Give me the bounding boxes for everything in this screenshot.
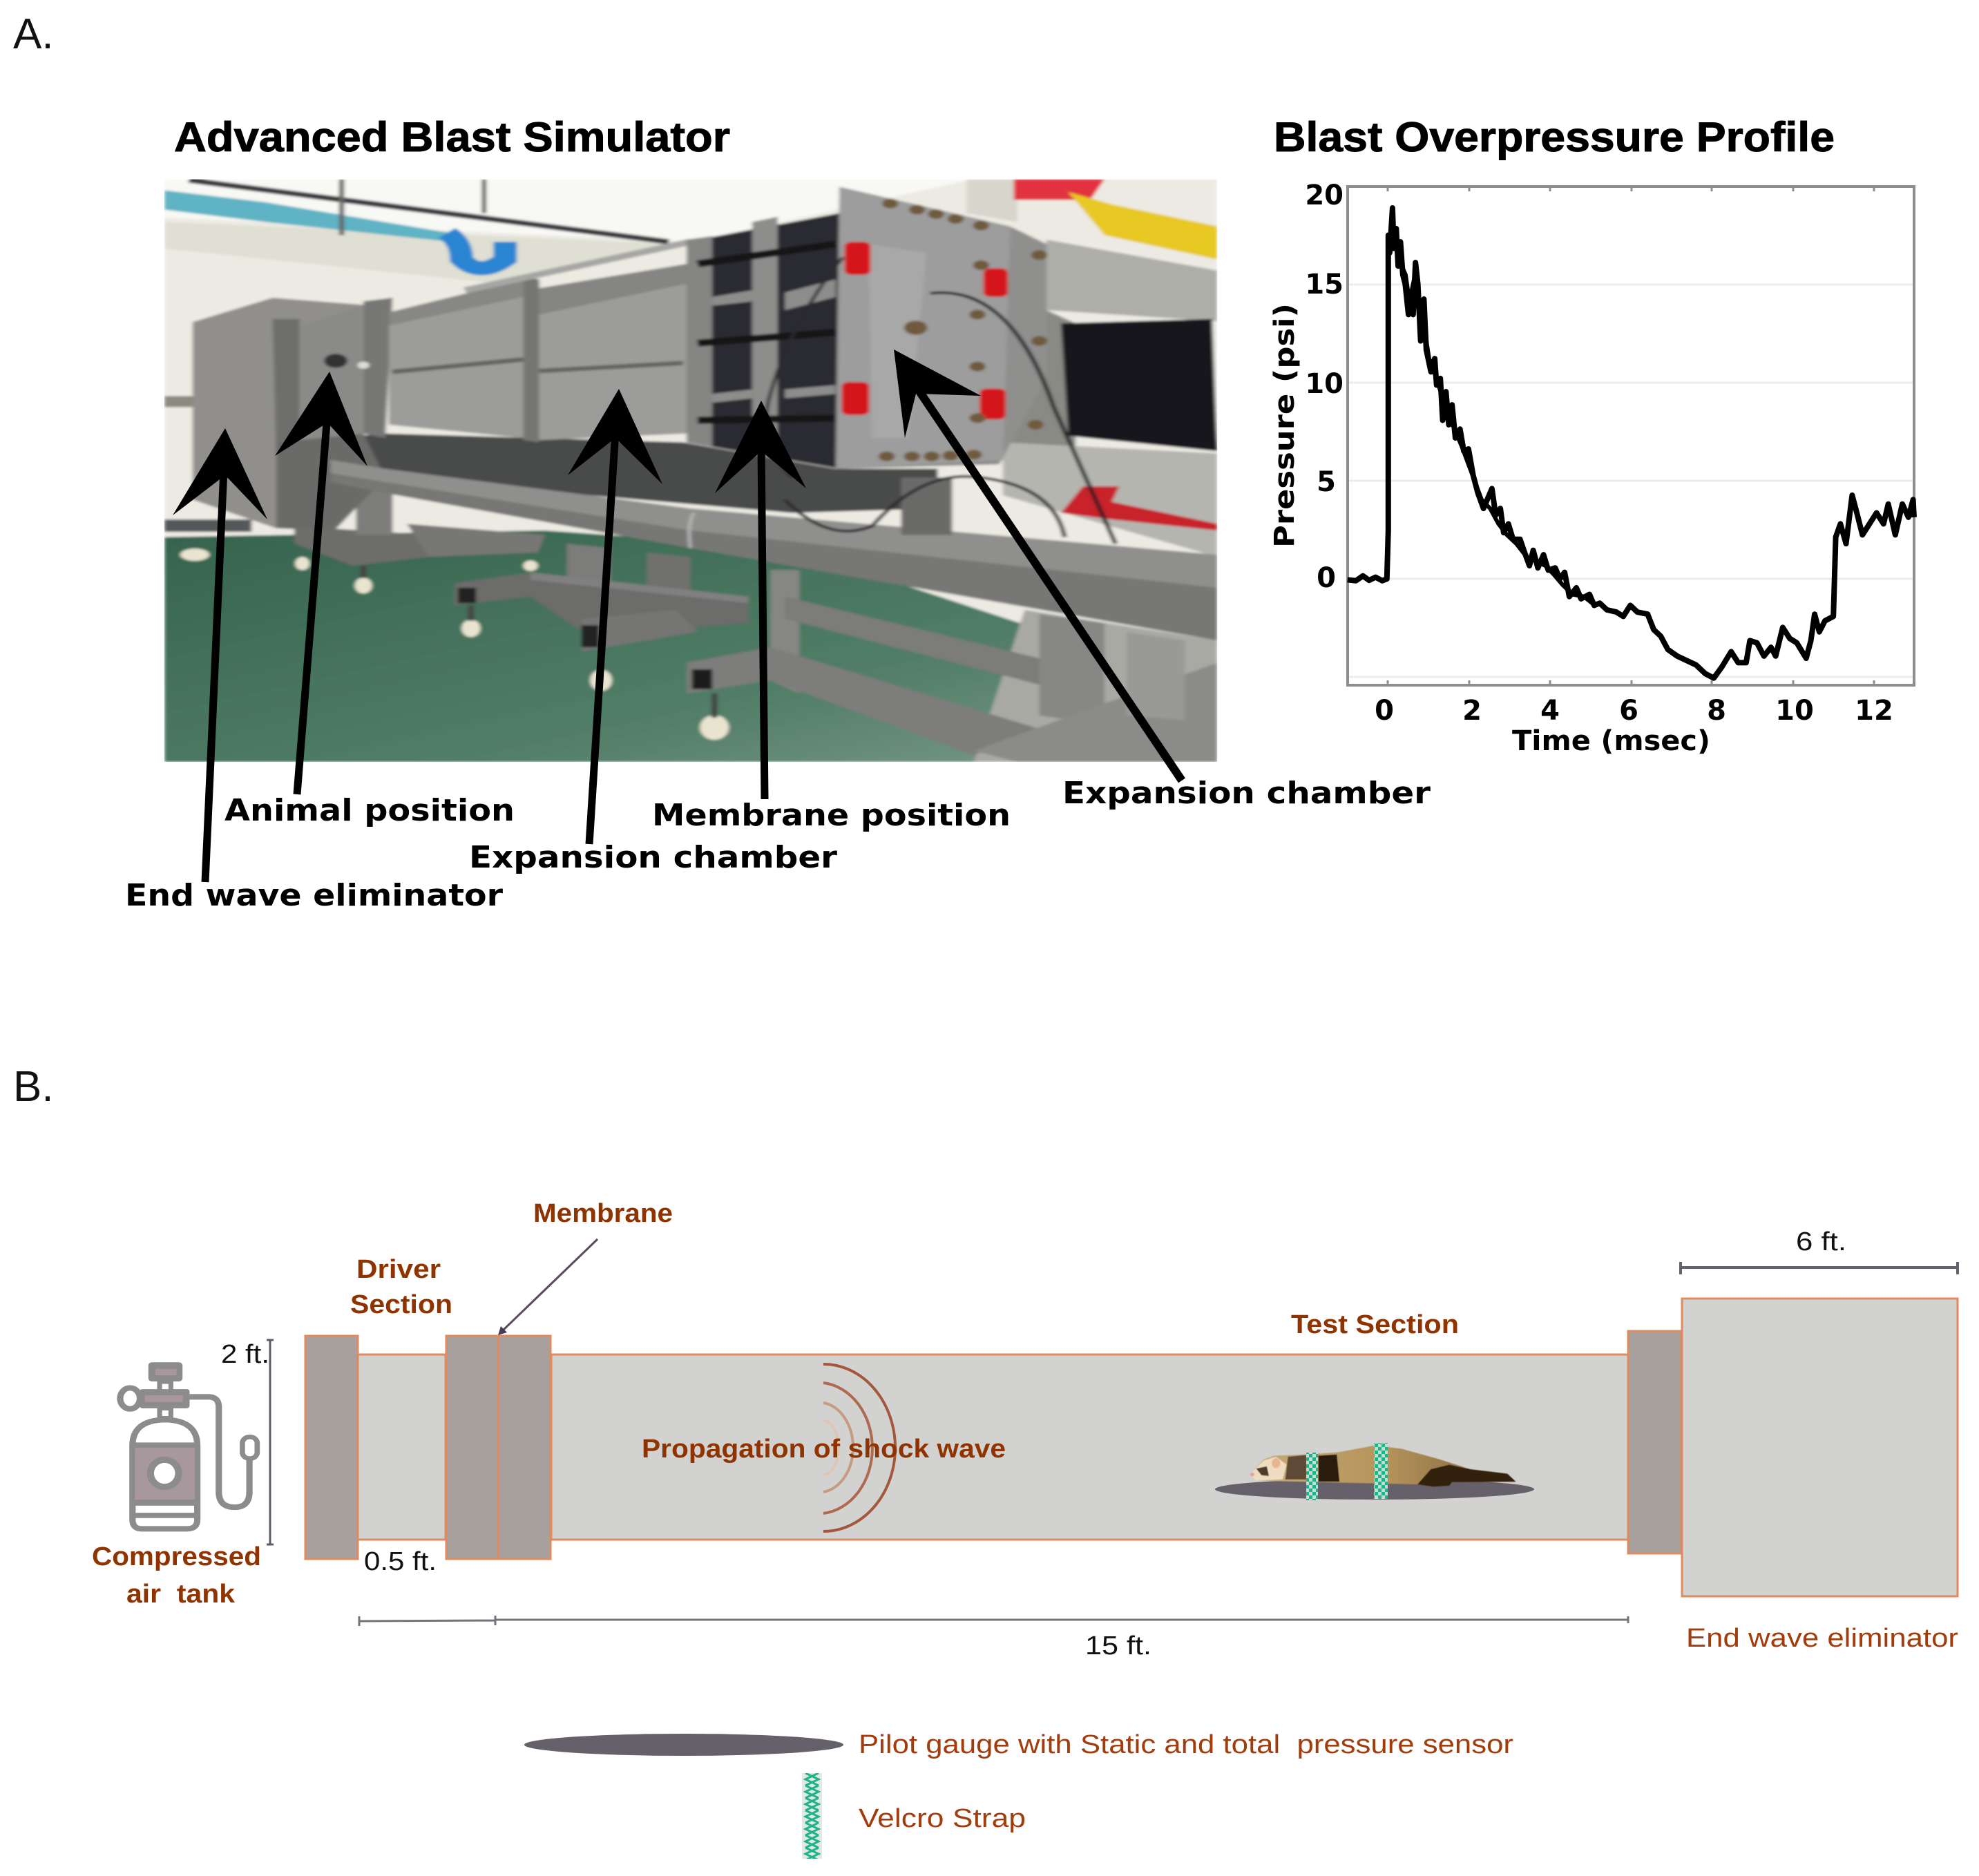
arrow: expansion chamber [568, 389, 662, 844]
icon: shock wave arcs [823, 1364, 895, 1531]
x-axis tick labels: 0 [1375, 695, 1394, 727]
label: Animal position: Animal position [224, 793, 515, 828]
x-axis tick labels [1375, 695, 1893, 727]
chart: blast overpressure profile [1269, 180, 1914, 757]
legend: velcro strap [802, 1773, 1026, 1859]
floor supports rear [294, 526, 429, 566]
panel label: B: B. [13, 1063, 54, 1111]
y-axis tick labels: 15 [1305, 269, 1344, 300]
flange plate [841, 226, 1049, 470]
heading: Blast Overpressure Profile: Blast Overpressure Profile [1274, 114, 1835, 160]
label: Driver Section [350, 1255, 452, 1319]
x-axis tick labels: 2 [1462, 695, 1482, 727]
test section tube [551, 1355, 1629, 1540]
ladder section [709, 212, 842, 470]
legend: pilot gauge: Pilot gauge with Static and total pressure sensor [859, 1730, 1513, 1759]
x-axis tick labels: 6 [1619, 695, 1638, 727]
arrow: end wave eliminator [173, 428, 267, 882]
label: Expansion chamber lower: Expansion chamber [469, 840, 837, 875]
label: End wave eliminator: End wave eliminator [125, 878, 503, 913]
arrow: animal position [275, 372, 367, 794]
x-axis tick labels: 10 [1775, 695, 1814, 727]
label: Propagation of shock wave: Propagation of shock wave [642, 1435, 1006, 1464]
membrane flange left [446, 1336, 498, 1559]
heading: Advanced Blast Simulator: Advanced Blast Simulator [174, 114, 730, 160]
dimension: 2 ft [221, 1340, 274, 1544]
panel label: A: A. [13, 10, 54, 58]
diagram: blast tube [305, 1299, 1958, 1596]
end wave eliminator box [1682, 1299, 1958, 1596]
y-axis tick labels: 20 [1305, 180, 1344, 211]
label: Membrane: Membrane [533, 1199, 673, 1228]
label: Driver Section: Driver [356, 1255, 441, 1284]
label: Expansion chamber right: Expansion chamber [1062, 776, 1431, 811]
dimension: 2 ft: 2 ft. [221, 1340, 269, 1369]
dimension: 15 ft [359, 1616, 1628, 1660]
y-axis title: Pressure (psi) [1269, 303, 1301, 548]
x-axis tick labels: 12 [1855, 695, 1893, 727]
dimension: 6 ft: 6 ft. [1796, 1227, 1846, 1256]
membrane flange right [498, 1336, 551, 1559]
label: Membrane position: Membrane position [652, 798, 1011, 833]
x-axis tick labels: 8 [1707, 695, 1726, 727]
dimension: 0.5 ft: 0.5 ft. [364, 1547, 437, 1576]
label: Driver Section: Section [350, 1290, 452, 1319]
label: Test Section: Test Section [1291, 1310, 1459, 1339]
end wave box [193, 298, 363, 528]
label: End wave eliminator: End wave eliminator [1686, 1624, 1958, 1653]
chamber panels [389, 279, 524, 438]
legend: velcro strap: Velcro Strap [859, 1804, 1026, 1833]
y-axis tick labels: 0 [1317, 562, 1336, 594]
plot frame and grid [1348, 186, 1914, 685]
arrow: membrane pointer [498, 1239, 597, 1335]
main beam [331, 462, 1217, 641]
driver flange [305, 1336, 358, 1559]
legend: pilot gauge [524, 1730, 1513, 1759]
lower frame [567, 544, 611, 588]
label: Compressed air tank [92, 1542, 261, 1609]
y-axis tick labels [1305, 180, 1344, 594]
y-axis tick labels: 5 [1317, 466, 1336, 498]
illustration: ferret on pilot gauge with straps [1215, 1443, 1534, 1500]
ferret [1250, 1446, 1516, 1486]
driver section tube [357, 1355, 446, 1540]
icon: compressed air tank [120, 1362, 257, 1529]
arrow: membrane position [715, 401, 806, 799]
arrow: expansion chamber right [894, 350, 1182, 781]
x-axis tick labels: 4 [1540, 695, 1560, 727]
x-axis title: Time (msec) [1512, 725, 1710, 757]
dimension: 6 ft [1681, 1227, 1958, 1274]
feet [180, 548, 729, 740]
photo: advanced blast simulator apparatus [164, 180, 1217, 762]
pressure trace [1348, 208, 1914, 678]
cables [766, 257, 843, 477]
underside shadow [283, 434, 937, 513]
y-axis tick labels: 10 [1305, 368, 1344, 400]
velcro strap rear [1374, 1443, 1388, 1499]
outlet flange [1628, 1331, 1681, 1553]
velcro strap front [1306, 1453, 1318, 1500]
far wall and bins [966, 180, 1017, 222]
pilot gauge [1215, 1479, 1534, 1500]
dimension: 15 ft: 15 ft. [1085, 1631, 1151, 1660]
label: Compressed air tank: Compressed [92, 1542, 261, 1571]
label: Compressed air tank: air tank [126, 1580, 236, 1609]
